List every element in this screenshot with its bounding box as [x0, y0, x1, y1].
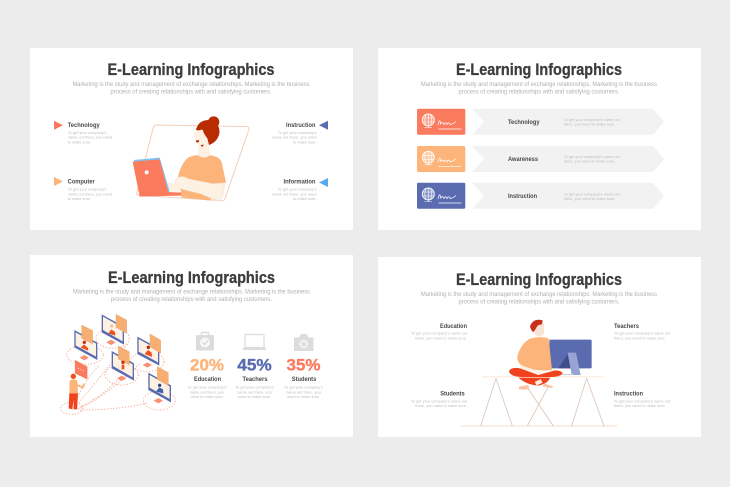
panel: bottom-left slide: [30, 255, 353, 437]
description: there, you need to make sure.: [564, 122, 615, 127]
panel: top-right slide: [378, 48, 701, 230]
row: instruction: [417, 183, 664, 209]
item: instruction: name out there, you need: [272, 135, 316, 140]
item: information: [272, 178, 317, 201]
description: need to make sure.: [287, 394, 320, 399]
item: technology: To get your company's: [68, 130, 107, 135]
item: instruction: To get your company's name out: [614, 398, 671, 403]
title: E-Learning Infographics: [456, 270, 622, 289]
description: [564, 117, 621, 127]
item: instruction: there, you need to make sure.: [614, 403, 666, 408]
icon: technology arrow: [54, 121, 63, 130]
item: information: to make sure.: [293, 196, 316, 201]
subtitle: process of creating relationships with and satisfying customers.: [458, 298, 620, 305]
description: To get your company's: [188, 385, 226, 390]
description: To get your company's: [284, 385, 323, 390]
icon: computer arrow: [54, 177, 63, 186]
screen 5: [148, 367, 171, 403]
icon: information arrow: [319, 178, 328, 187]
item: technology: Technology: [68, 122, 100, 129]
subtitle: [421, 291, 657, 305]
row: awareness: [417, 146, 664, 172]
title: E-Learning Infographics: [108, 60, 274, 79]
panel: bottom-right slide: [378, 257, 701, 437]
item: computer: name out there, you need: [68, 191, 112, 196]
screen 3: [137, 334, 161, 368]
item: teachers: To get your company's name out: [614, 331, 671, 336]
icon: camera: [294, 334, 314, 351]
item: computer: To get your company's: [68, 187, 107, 192]
label: Students: [292, 376, 316, 383]
speech card: [75, 360, 87, 379]
item: instruction: to make sure.: [293, 139, 316, 144]
item: students: To get your company's name out: [411, 398, 468, 403]
subtitle: Marketing is the study and management of exchange relationships. Marketing is the business: [73, 288, 310, 296]
illustration: student at desk: [461, 320, 617, 426]
label: Awareness: [508, 156, 538, 163]
icon: instruction arrow: [319, 121, 328, 130]
item: education: To get your company's name out: [411, 331, 468, 336]
icon: laptop: [243, 334, 266, 350]
title: E-Learning Infographics: [456, 60, 622, 79]
icon card: globe and signature: [417, 109, 465, 135]
label: Teachers: [242, 376, 268, 383]
description: To get your company's: [235, 385, 274, 390]
screen 2: [102, 314, 127, 345]
subtitle: Marketing is the study and management of exchange relationships. Marketing is the business: [421, 81, 657, 88]
description: [564, 154, 621, 164]
item: students: [411, 390, 468, 408]
screen 4: [112, 346, 134, 381]
icon card: globe and signature: [417, 146, 465, 172]
description: name out there, you: [190, 389, 224, 394]
item: instruction: Instruction: [614, 390, 643, 398]
arrow band: [472, 109, 664, 135]
desk and floor: [461, 377, 617, 426]
illustration: woman with laptop: [133, 116, 249, 201]
description: need to make sure.: [190, 394, 224, 399]
subtitle: process of creating relationships with and satisfying customers.: [110, 88, 272, 95]
item: education: [411, 323, 468, 340]
item: computer: Computer: [68, 178, 95, 186]
stat: students: [284, 334, 323, 399]
item: teachers: [614, 323, 671, 340]
description: name out there, you: [237, 389, 272, 394]
item: teachers: there, you need to make sure.: [614, 335, 666, 340]
icon: case with check: [196, 332, 214, 350]
stat: education: [188, 332, 226, 399]
label: Technology: [508, 119, 540, 126]
item: education: Education: [440, 323, 467, 330]
monitor: [549, 340, 592, 375]
presenter figure: [69, 374, 84, 409]
subtitle: process of creating relationships with and satisfying customers.: [458, 88, 620, 95]
description: To get your company's name out: [564, 191, 621, 196]
item: students: there, you need to make sure.: [415, 403, 467, 408]
item: information: To get your company's: [278, 187, 317, 192]
subtitle: [72, 81, 310, 95]
item: computer: [68, 178, 112, 201]
label: Instruction: [508, 193, 537, 200]
subtitle: [73, 288, 310, 303]
description: [188, 385, 226, 399]
item: technology: to make sure.: [68, 139, 91, 144]
percentage: 35%: [286, 356, 321, 374]
item: information: Information: [284, 178, 316, 186]
item: technology: name out there, you need: [68, 135, 112, 140]
subtitle: [421, 81, 657, 95]
description: [284, 385, 323, 399]
screen 1: [74, 325, 97, 360]
item: computer: to make sure.: [68, 196, 91, 201]
row: technology: [417, 109, 664, 135]
description: there, you need to make sure.: [564, 196, 615, 201]
subtitle: Marketing is the study and management of exchange relationships. Marketing is the business: [72, 81, 310, 88]
illustration: isometric screens network: [61, 314, 175, 414]
item: students: Students: [440, 390, 465, 398]
item: instruction: [614, 390, 671, 408]
stat: teachers: [235, 334, 274, 399]
subtitle: process of creating relationships with and satisfying customers.: [111, 296, 272, 303]
description: there, you need to make sure.: [564, 159, 615, 164]
description: [564, 191, 621, 201]
description: [235, 385, 274, 399]
item: technology: [68, 122, 112, 144]
label: Education: [194, 376, 221, 383]
description: To get your company's name out: [564, 154, 621, 159]
description: To get your company's name out: [564, 117, 621, 122]
item: instruction: [272, 122, 317, 144]
item: instruction: Instruction: [286, 122, 316, 129]
item: teachers: Teachers: [614, 323, 639, 330]
arrow band: [472, 146, 664, 172]
description: name out there, you: [286, 389, 321, 394]
item: education: there, you need to make sure.: [415, 335, 467, 340]
panel: top-left slide: [30, 48, 353, 230]
item: information: name out there, you need: [272, 191, 316, 196]
description: need to make sure.: [238, 394, 271, 399]
arrow band: [472, 183, 664, 209]
subtitle: Marketing is the study and management of exchange relationships. Marketing is the business: [421, 291, 657, 298]
percentage: 20%: [190, 356, 224, 374]
student: [509, 320, 563, 390]
title: E-Learning Infographics: [108, 268, 275, 287]
icon card: globe and signature: [417, 183, 465, 209]
percentage: 45%: [237, 356, 272, 374]
item: instruction: To get your company's: [278, 130, 317, 135]
